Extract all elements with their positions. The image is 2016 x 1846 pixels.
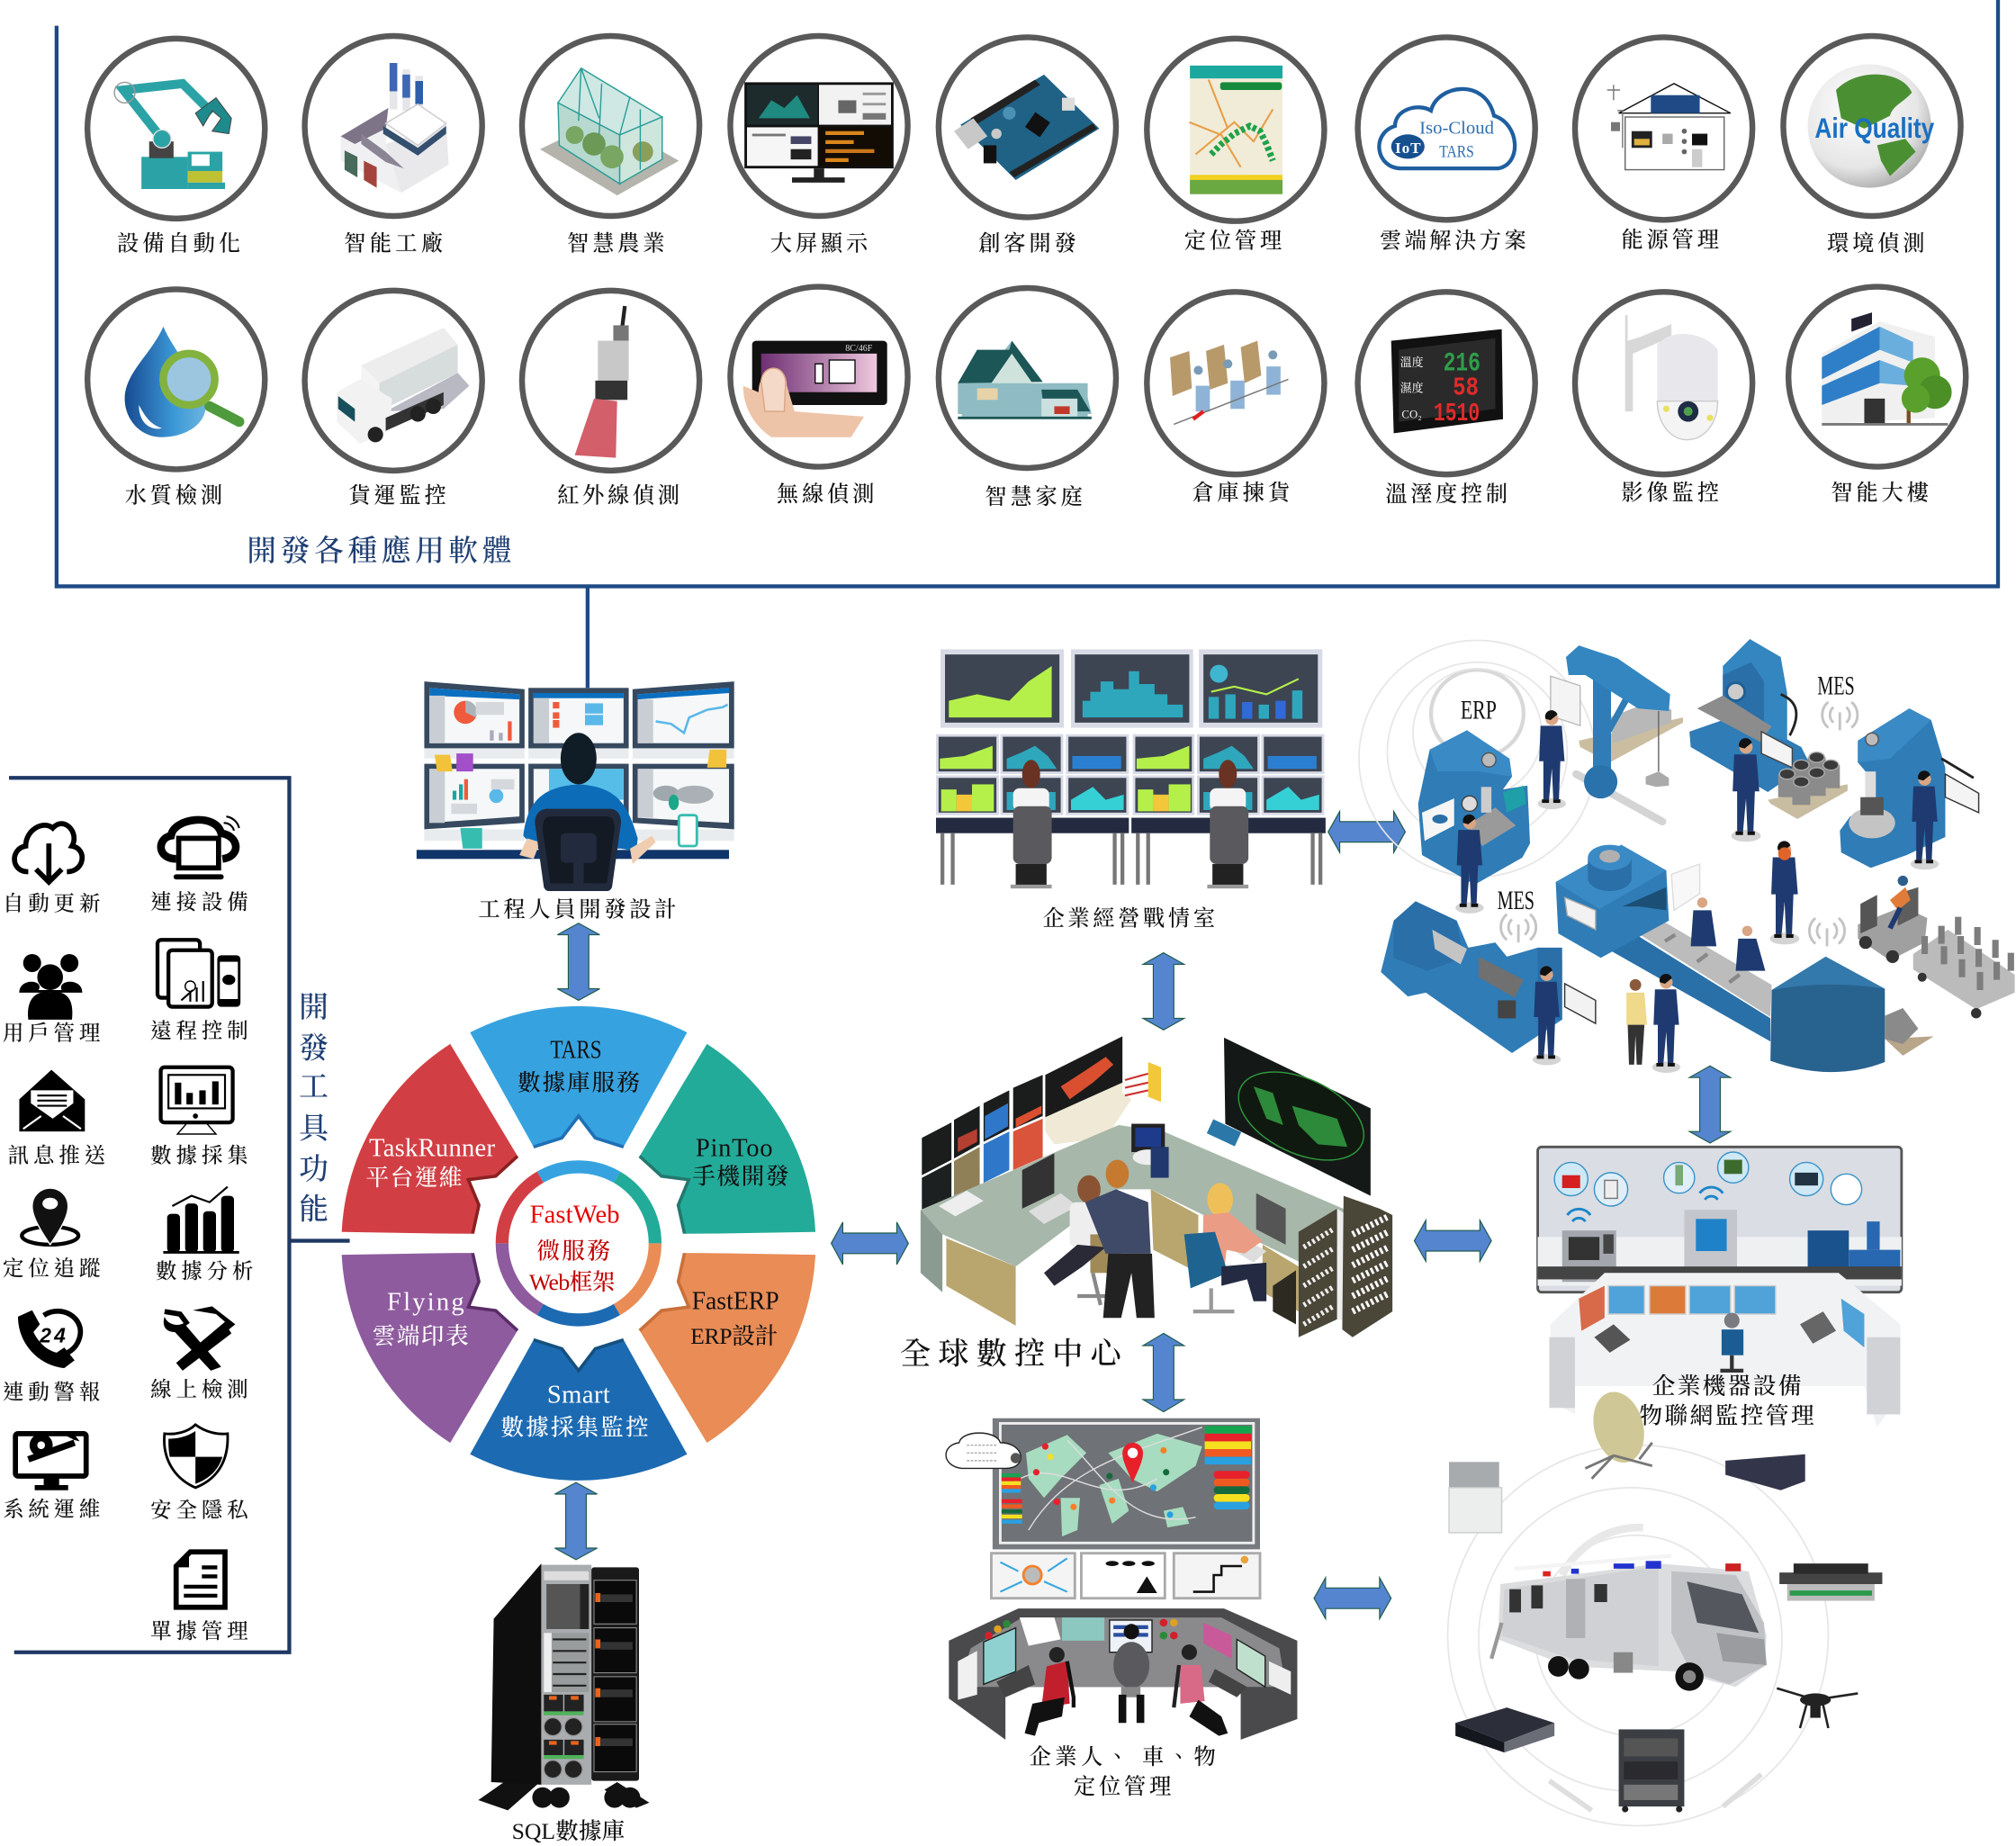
label: 安全隱私	[150, 1499, 249, 1523]
text: Smart: Smart	[547, 1382, 610, 1409]
label: 定位追蹤	[3, 1256, 101, 1281]
text: Smart	[500, 1382, 649, 1440]
label: engineer design: 工程人員開發設計	[478, 898, 676, 923]
text: FastERP	[690, 1287, 779, 1349]
machine: crane	[1551, 645, 1683, 822]
illustration: world location map	[946, 1418, 1260, 1549]
label: 水質檢測	[125, 484, 222, 509]
icon: temperature humidity board: 濕度	[1400, 382, 1424, 395]
antenna signals	[1501, 702, 1858, 946]
icon: 24h alert phone	[18, 1310, 80, 1368]
illustration: location console	[949, 1608, 1297, 1740]
arrow: control center to IoT panel	[1414, 1220, 1491, 1261]
text: FastERP: ERP設計	[690, 1323, 778, 1349]
heading: development tool functions vertical: 發	[299, 1032, 328, 1066]
device: network switch	[1779, 1563, 1882, 1601]
icon: temperature humidity board: 216	[1444, 348, 1480, 379]
segment: PinToo	[608, 1031, 838, 1289]
label: 創客開發	[978, 232, 1076, 257]
label: 定位管理	[1184, 230, 1282, 254]
machine: conveyor	[1556, 845, 1934, 1072]
label: 線上檢測	[150, 1377, 248, 1401]
label: location management: 定位管理	[1074, 1775, 1171, 1799]
label: 能源管理	[1621, 228, 1719, 252]
icon: cloud solution	[1358, 37, 1535, 220]
text: PinToo	[692, 1134, 788, 1190]
label: 智能工廠	[344, 232, 443, 257]
icon: document form	[175, 1552, 225, 1607]
text: TARS: TARS	[550, 1037, 602, 1065]
label: 單據管理	[150, 1619, 248, 1643]
icon: 24h alert phone: 24	[39, 1323, 66, 1346]
device: NVR	[1725, 1454, 1805, 1490]
label: 自動更新	[3, 891, 100, 915]
icon: users	[19, 954, 82, 1020]
icon: energy management	[1575, 37, 1752, 220]
label: 雲端解決方案	[1380, 230, 1526, 254]
icon: surveillance camera	[1575, 292, 1752, 474]
icon: warehouse picking	[1147, 292, 1324, 474]
arrow: wheel to control center	[832, 1222, 908, 1265]
icon: data collection monitor	[161, 1067, 233, 1134]
wall screens	[922, 1036, 1378, 1214]
label: IoT monitoring: 物聯網監控管理	[1639, 1402, 1814, 1428]
label: 系統運維	[3, 1497, 100, 1521]
icon: smart home	[939, 288, 1116, 468]
panel: application software frame	[57, 0, 1998, 688]
text: TARS: 數據庫服務	[518, 1069, 640, 1095]
text: FastWeb centre: FastWeb	[530, 1202, 620, 1229]
label: 紅外線偵測	[557, 484, 680, 509]
text: FastWeb centre: 微服務	[536, 1238, 610, 1265]
heading: development tool functions vertical: 能	[299, 1193, 328, 1226]
chart: six-part platform wheel	[319, 1006, 838, 1481]
icon: big screen display	[730, 36, 908, 216]
arrow: engineer to wheel	[557, 923, 599, 1000]
illustration: small map tiles	[991, 1553, 1260, 1598]
text: TaskRunner: 平台運維	[365, 1165, 463, 1191]
label: MES top: MES	[1817, 671, 1855, 700]
machine: top right	[1689, 639, 1848, 819]
icon: temperature humidity board: CO₂	[1401, 408, 1422, 420]
screens: lower row	[937, 777, 1323, 814]
text: Flying: Flying	[387, 1289, 464, 1317]
machine: left lathe	[1381, 901, 1596, 1053]
icon: air quality globe: Air Quality	[1814, 113, 1935, 144]
icon: location map app	[1147, 39, 1324, 221]
icon: smart greenhouse	[522, 36, 699, 216]
icon: location tracking pin	[22, 1188, 78, 1245]
machine: ERP	[1418, 730, 1530, 885]
text: FastWeb centre	[529, 1202, 620, 1295]
icon: water quality	[87, 289, 265, 469]
icon: data analysis bars	[163, 1187, 239, 1254]
segment: FastERP	[608, 1198, 838, 1456]
illustration: engineer at six monitors	[417, 681, 734, 891]
label: 智慧家庭	[985, 485, 1083, 509]
label: 環境偵測	[1827, 232, 1925, 257]
seated operator with blonde hair	[1184, 1183, 1266, 1311]
device: box computer	[1455, 1707, 1554, 1752]
text: FastERP: FastERP	[692, 1287, 779, 1315]
label: 設備自動化	[117, 232, 240, 257]
heading: development tool functions vertical	[299, 992, 330, 1226]
illustration: tower server	[478, 1563, 649, 1810]
label: 遠程控制	[150, 1019, 248, 1043]
illustration: MES factory floor	[1359, 639, 2015, 1073]
device: rack	[1619, 1729, 1684, 1813]
workers	[1455, 710, 1939, 1073]
illustration: mobile command vehicle system	[1448, 1386, 1882, 1826]
label: ERP: ERP	[1461, 696, 1497, 725]
icon: remote control devices	[158, 940, 240, 1007]
illustration: global control center	[921, 1036, 1392, 1337]
icon: temperature humidity board: 1510	[1434, 399, 1480, 428]
text: Flying	[373, 1289, 469, 1349]
label: enterprise machines: 企業機器設備	[1652, 1373, 1801, 1400]
arrow: control center to location panel	[1143, 1333, 1184, 1412]
text: Flying: 雲端印表	[373, 1323, 469, 1349]
server cabinets	[1273, 1196, 1392, 1337]
icon: maker board	[939, 37, 1116, 217]
icon: message envelope	[19, 1070, 85, 1131]
label: MES lower: MES	[1498, 886, 1534, 915]
icon: tools	[164, 1306, 235, 1371]
label: 智能大樓	[1831, 482, 1930, 506]
icon: temperature humidity board	[1358, 292, 1535, 474]
icon: cloud download	[14, 824, 82, 882]
seated operator	[1044, 1175, 1121, 1305]
label: 連接設備	[150, 890, 248, 914]
text: TaskRunner: TaskRunner	[369, 1134, 495, 1162]
icon: cloud solution: Iso-Cloud	[1419, 119, 1494, 139]
arrow: location to vehicle	[1314, 1578, 1391, 1619]
segment: TaskRunner	[319, 1031, 549, 1289]
text: PinToo: 手機開發	[692, 1164, 788, 1190]
heading: development tool functions vertical: 具	[299, 1112, 330, 1145]
icon: air quality globe	[1783, 36, 1961, 216]
icon: smart building	[1788, 287, 1966, 467]
icon: cloud solution: TARS	[1439, 142, 1474, 161]
label: 貨運監控	[348, 484, 446, 509]
connector stub from tools panel to wheel	[289, 1239, 350, 1242]
device: drone	[1777, 1688, 1858, 1728]
label: 無線偵測	[777, 482, 874, 507]
text: PinToo: PinToo	[696, 1134, 773, 1162]
heading: development tool functions vertical: 開	[299, 992, 328, 1024]
icon: cargo truck	[305, 291, 482, 471]
icon: wireless sensor	[730, 287, 908, 467]
label: people vehicles objects: 企業人、 車、物	[1030, 1745, 1216, 1769]
icon: equipment automation robot	[87, 39, 265, 219]
icon: infrared sensor	[522, 291, 699, 471]
label: SQL database: SQL數據庫	[512, 1818, 625, 1844]
panel: development tool functions	[9, 778, 289, 1652]
icon: cloud device	[161, 816, 239, 879]
icon: cloud solution: IoT	[1395, 140, 1421, 157]
device: outdoor unit	[1449, 1462, 1502, 1533]
icon: system maintenance monitor	[15, 1434, 86, 1490]
arrow: war room to control center	[1143, 953, 1184, 1030]
icon: smart factory	[305, 36, 482, 216]
heading: development tool functions vertical: 工	[299, 1072, 328, 1104]
machine: cart with operator	[1858, 876, 2015, 1018]
text: Smart: 數據採集監控	[500, 1414, 649, 1440]
icon: wireless sensor: 8C/46F	[845, 344, 873, 354]
segment: Smart	[470, 1340, 687, 1481]
label: 數據分析	[156, 1259, 253, 1283]
illustration: enterprise war room	[936, 649, 1326, 888]
label: 用戶管理	[3, 1022, 101, 1046]
label: 智慧農業	[567, 232, 666, 257]
arrow: war room to factory	[1328, 811, 1405, 852]
label: 數據採集	[150, 1143, 248, 1167]
label: 訊息推送	[8, 1143, 105, 1167]
label: 大屏顯示	[770, 232, 868, 257]
text: TARS	[518, 1037, 640, 1095]
label: 影像監控	[1621, 482, 1719, 506]
arrow: wheel to server	[554, 1482, 598, 1560]
icon: temperature humidity board: 58	[1453, 374, 1479, 403]
icon: temperature humidity board: 溫度	[1400, 356, 1424, 369]
text: TaskRunner	[365, 1134, 495, 1191]
arrow: factory to IoT panel	[1689, 1066, 1731, 1143]
text: FastWeb centre: Web框架	[529, 1269, 616, 1295]
heading: develop applications: 開發各種應用軟體	[247, 535, 512, 568]
illustration: IoT monitoring console	[1538, 1147, 1902, 1427]
desk	[921, 1125, 1373, 1266]
segment: Flying	[319, 1198, 549, 1456]
screens: upper row	[937, 735, 1323, 773]
label: 連動警報	[3, 1380, 100, 1404]
label: 倉庫揀貨	[1192, 482, 1292, 506]
heading: development tool functions vertical: 功	[299, 1153, 328, 1186]
device: satellite dish	[1585, 1386, 1652, 1479]
icon: security shield	[164, 1425, 228, 1488]
label: war room: 企業經營戰情室	[1043, 907, 1215, 932]
label: 溫溼度控制	[1385, 482, 1508, 507]
machine: right	[1840, 708, 1979, 868]
standing supervisor	[1085, 1160, 1155, 1318]
segment: TARS	[470, 1006, 687, 1147]
label: global control center: 全球數控中心	[900, 1337, 1123, 1372]
